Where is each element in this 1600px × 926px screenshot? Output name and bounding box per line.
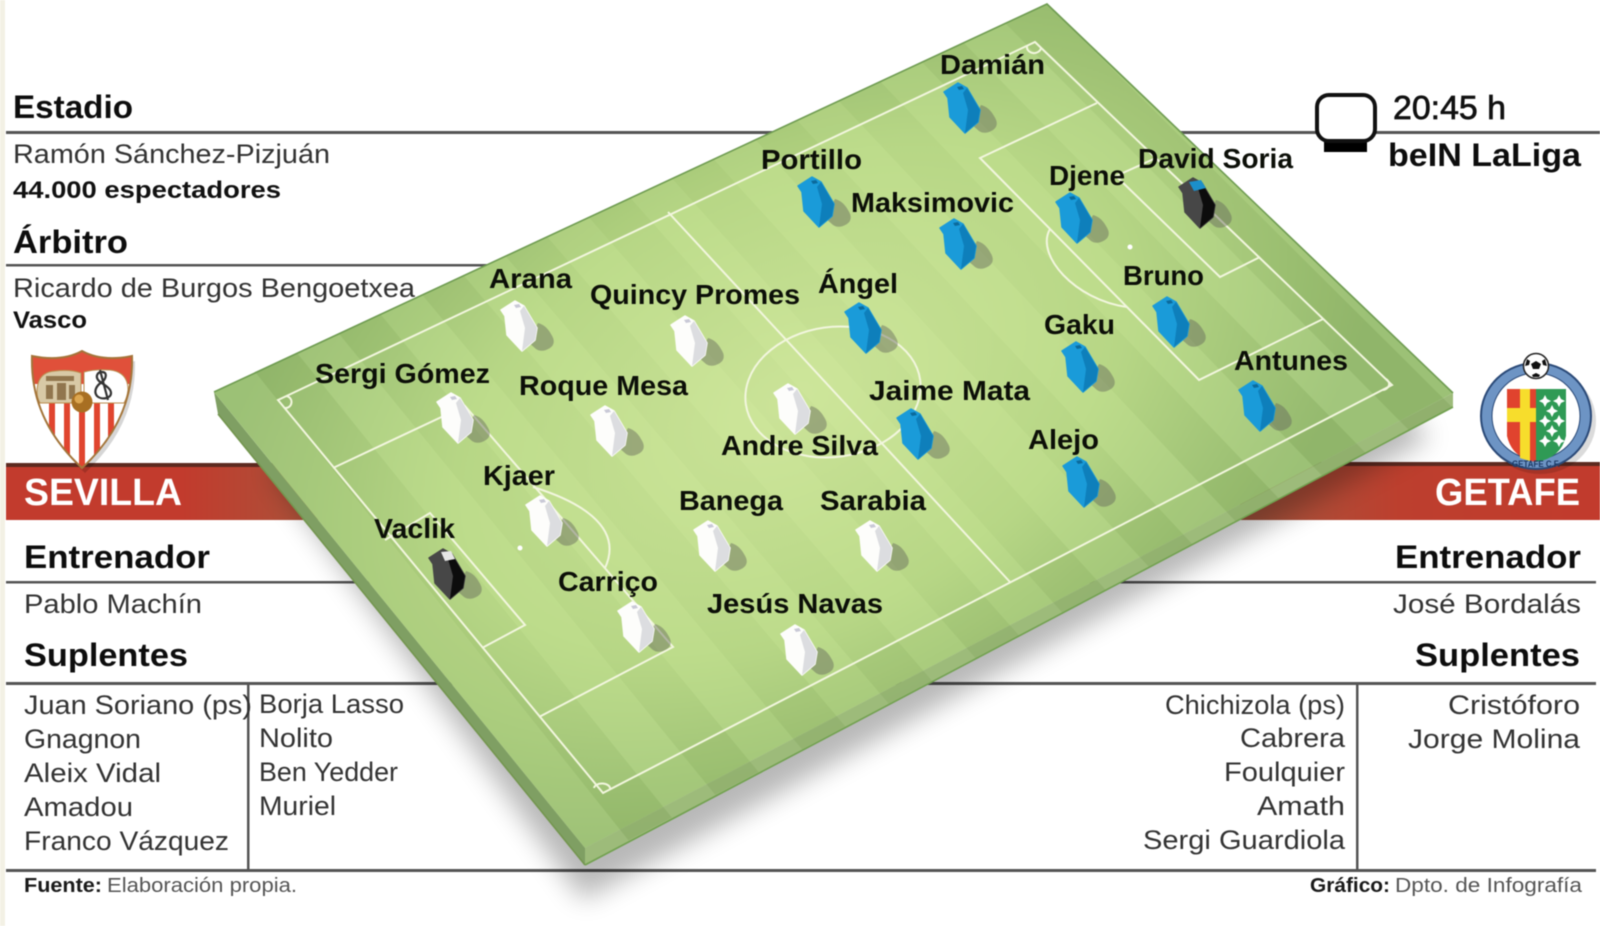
player: Ángel	[818, 268, 898, 353]
source note: Fuente:	[24, 875, 102, 897]
substitutes Getafe column 2: Cristóforo	[1448, 690, 1580, 720]
mowing stripes	[256, 4, 1453, 840]
credit note: Dpto. de Infografía	[1395, 875, 1583, 897]
icon: television	[1317, 95, 1375, 152]
player: Damián: Damián	[940, 49, 1045, 80]
page edge strip	[0, 0, 5, 926]
stadium capacity: 44.000 espectadores	[13, 177, 281, 204]
football pitch	[214, 4, 1453, 865]
player: Quincy Promes	[590, 279, 800, 366]
substitutes Getafe column 2	[1408, 690, 1581, 754]
banner: Sevilla: SEVILLA	[24, 472, 182, 514]
substitutes Sevilla column 2: Borja Lasso	[259, 689, 404, 719]
player: Roque Mesa: Roque Mesa	[519, 370, 688, 401]
banner: Getafe	[1240, 462, 1600, 520]
player: Jaime Mata	[869, 375, 1030, 459]
player: Sarabia: Sarabia	[820, 485, 926, 516]
player: Portillo: Portillo	[761, 144, 862, 175]
substitutes Sevilla column 1: Gnagnon	[24, 724, 141, 754]
player: Ángel: Ángel	[818, 268, 898, 299]
substitutes Sevilla column 1: Amadou	[24, 792, 133, 822]
player: Antunes: Antunes	[1234, 345, 1348, 376]
credit note	[1310, 875, 1583, 897]
substitutes Sevilla column 1	[24, 690, 252, 856]
pitch side faces	[214, 392, 1453, 865]
player: Gaku: Gaku	[1044, 309, 1115, 340]
player: Andre Silva: Andre Silva	[721, 430, 878, 461]
heading: Estadio: Estadio	[13, 89, 133, 125]
player: Gaku	[1044, 309, 1115, 392]
player: Vaclik: Vaclik	[374, 513, 455, 544]
player: Bruno: Bruno	[1123, 260, 1204, 291]
player: Sarabia	[820, 485, 926, 571]
match time: 20:45 h	[1393, 89, 1506, 126]
substitutes Getafe column 2: Jorge Molina	[1408, 724, 1581, 754]
panel: Sevilla staff	[24, 539, 404, 856]
player: David Soria	[1138, 143, 1293, 228]
player: Kjaer	[483, 460, 579, 546]
stadium name: Ramón Sánchez-Pizjuán	[13, 139, 330, 169]
player: Quincy Promes: Quincy Promes	[590, 279, 800, 310]
pitch markings	[278, 42, 1392, 793]
panel: match info	[13, 89, 416, 334]
penalty spots	[518, 244, 1132, 550]
substitutes Getafe column 1: Chichizola (ps)	[1165, 690, 1345, 720]
substitutes Sevilla column 1: Aleix Vidal	[24, 758, 161, 788]
player: Banega	[679, 485, 783, 571]
player: Roque Mesa	[519, 370, 688, 456]
player: Banega: Banega	[679, 485, 783, 516]
credit note: Gráfico:	[1310, 875, 1390, 897]
substitutes Getafe column 1: Sergi Guardiola	[1143, 825, 1346, 855]
heading: Suplentes Sevilla: Suplentes	[24, 637, 188, 673]
player: Bruno	[1123, 260, 1206, 347]
panel: Getafe staff	[1143, 539, 1581, 855]
player: Sergi Gómez: Sergi Gómez	[315, 358, 490, 389]
player: Carriço	[558, 566, 671, 652]
player: Djene: Djene	[1049, 160, 1125, 191]
coach Sevilla: Pablo Machín	[24, 589, 202, 619]
player: Portillo	[761, 144, 862, 227]
substitutes Sevilla column 2: Nolito	[259, 723, 333, 753]
referee region: Vasco	[13, 307, 87, 334]
banner: Getafe: GETAFE	[1435, 472, 1580, 514]
substitutes Sevilla column 2: Muriel	[259, 791, 336, 821]
player: Jaime Mata: Jaime Mata	[869, 375, 1030, 406]
substitutes Sevilla column 1: Franco Vázquez	[24, 826, 229, 856]
player: Sergi Gómez	[315, 358, 490, 443]
source note: Elaboración propia.	[107, 875, 297, 897]
player: Maksimovic: Maksimovic	[851, 187, 1014, 218]
pitch margin band	[214, 4, 1453, 848]
player: Carriço: Carriço	[558, 566, 658, 597]
broadcaster: beIN LaLiga	[1388, 137, 1581, 173]
coach Getafe: José Bordalás	[1393, 589, 1581, 619]
substitutes Getafe column 1: Foulquier	[1224, 757, 1345, 787]
player: Andre Silva	[721, 384, 878, 461]
player: Arana	[489, 263, 572, 351]
heading: Entrenador Sevilla: Entrenador	[24, 539, 210, 575]
icon: Sevilla crest	[28, 348, 136, 473]
player: Antunes	[1234, 345, 1348, 431]
player: Arana: Arana	[489, 263, 572, 294]
player: Vaclik	[374, 513, 482, 599]
player: Kjaer: Kjaer	[483, 460, 555, 491]
substitutes Getafe column 1: Amath	[1257, 791, 1345, 821]
source note	[24, 875, 297, 897]
pitch edges	[214, 4, 1453, 865]
player: David Soria: David Soria	[1138, 143, 1293, 174]
substitutes Getafe column 1: Cabrera	[1240, 723, 1346, 753]
player: Alejo	[1028, 424, 1116, 507]
heading: Suplentes Getafe: Suplentes	[1415, 637, 1580, 673]
player: Jesús Navas	[707, 588, 883, 675]
substitutes Sevilla column 1: Juan Soriano (ps)	[24, 690, 252, 720]
heading: Entrenador Getafe: Entrenador	[1395, 539, 1581, 575]
player: Maksimovic	[851, 187, 1014, 269]
field drop shadow	[270, 60, 1430, 900]
icon: Getafe crest: GETAFE C.F.	[1512, 459, 1560, 469]
player: Djene	[1049, 160, 1125, 243]
player: Jesús Navas: Jesús Navas	[707, 588, 883, 619]
banner: Sevilla	[6, 463, 326, 520]
referee name: Ricardo de Burgos Bengoetxea	[13, 273, 416, 303]
icon: Getafe crest	[1481, 354, 1596, 474]
rule lines	[6, 131, 1600, 872]
player: Damián	[940, 49, 1045, 133]
substitutes Sevilla column 2	[259, 689, 404, 821]
player: Alejo: Alejo	[1028, 424, 1099, 455]
pitch surface	[214, 4, 1453, 848]
substitutes Getafe column 1	[1143, 690, 1346, 855]
substitutes Sevilla column 2: Ben Yedder	[259, 757, 398, 787]
heading: Árbitro: Árbitro	[13, 224, 128, 260]
